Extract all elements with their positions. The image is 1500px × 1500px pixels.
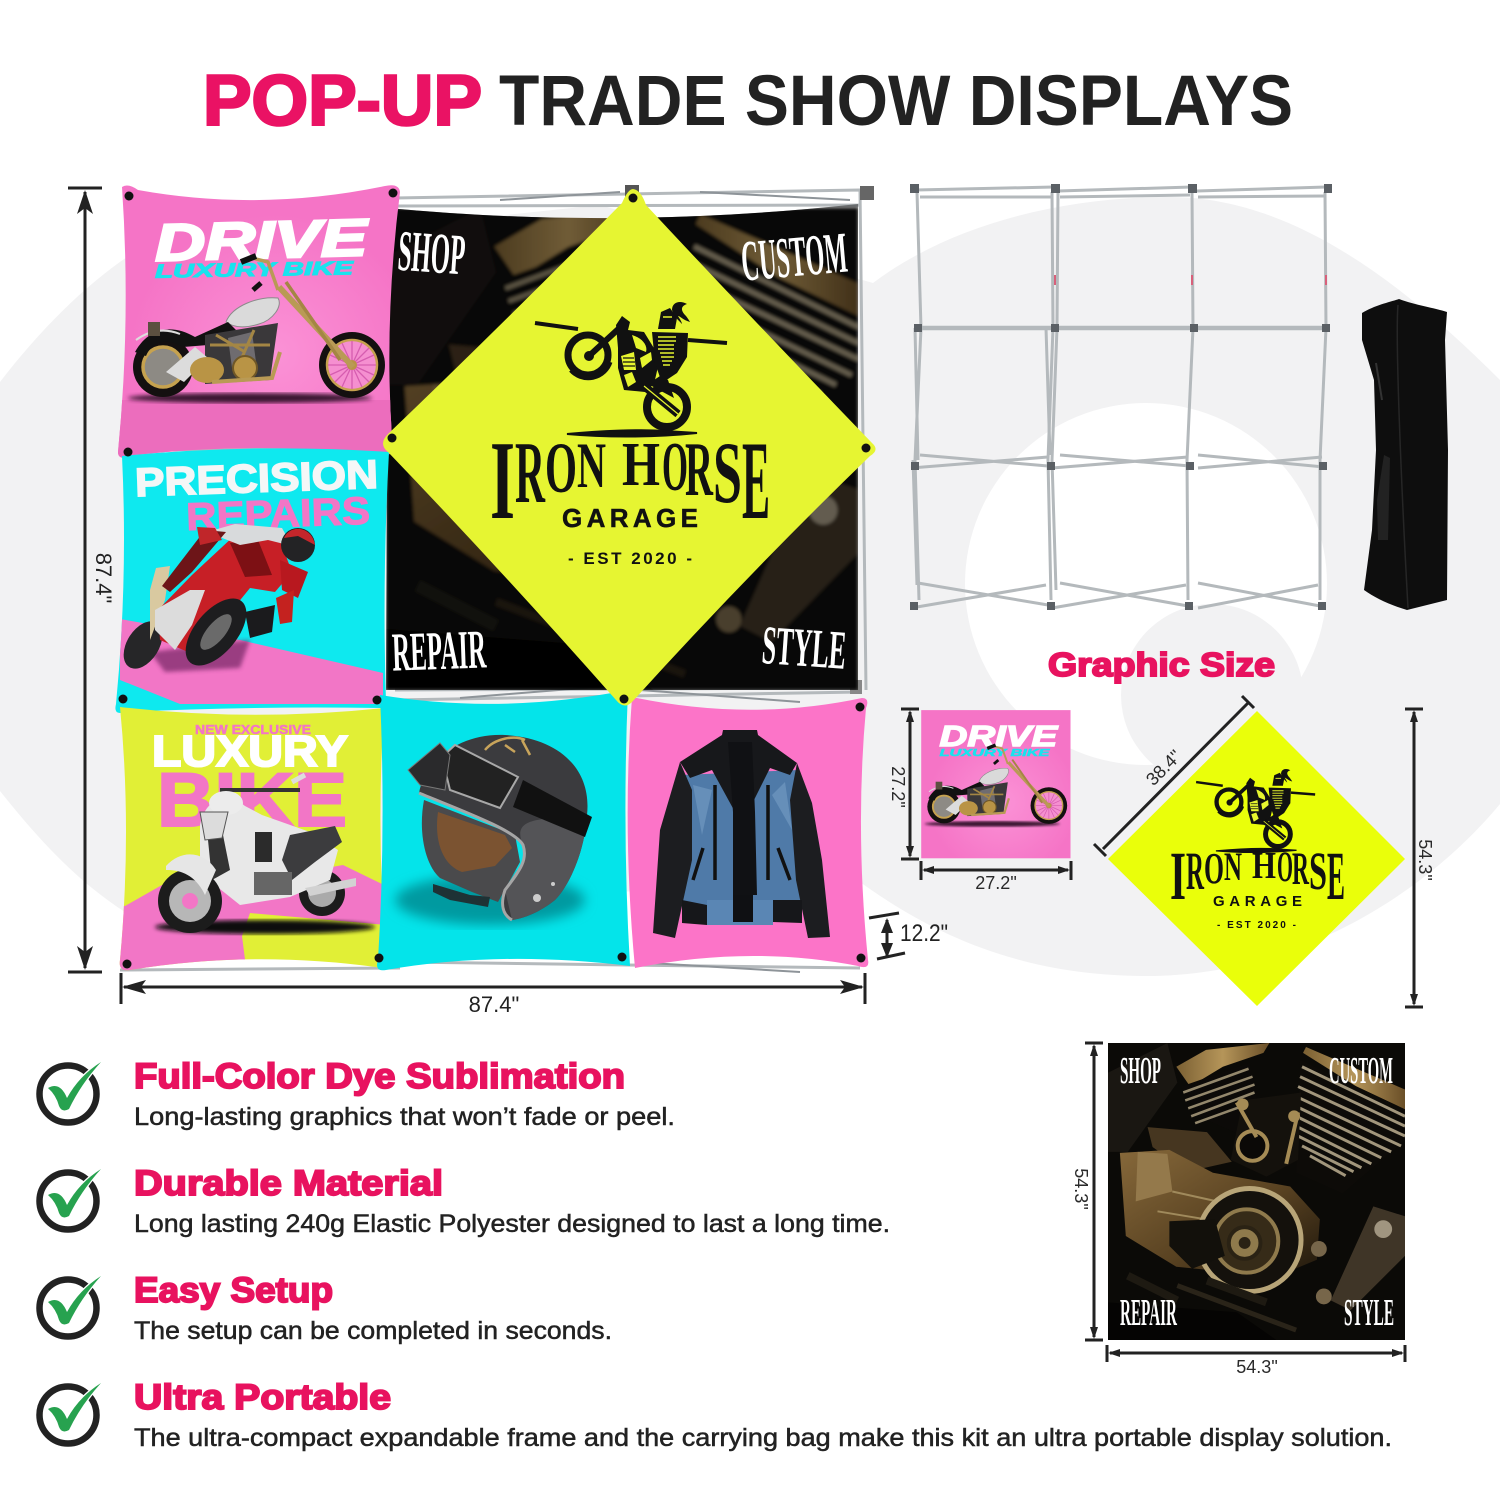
feature: dye sublimation: Long-lasting graphics that won’t fade or peel. [134,1103,675,1131]
panel: precision repairs: PRECISION [134,453,379,505]
text: established: - EST 2020 - [568,549,692,568]
panel: iron horse diamond [383,189,876,706]
panel: engine backdrop [386,200,861,692]
small graphic: iron horse diamond: - EST 2020 - [1217,920,1296,931]
icon: check mark [40,1169,101,1230]
dimension: backdrop width [1107,1345,1405,1377]
text: iron horse: O [662,429,688,506]
dimension: backdrop height [1071,1043,1103,1340]
panel: engine backdrop: REPAIR [391,618,488,683]
feature: durable material [40,1164,890,1238]
dimension: display height [68,188,116,972]
small graphic: iron horse diamond: H [1252,845,1276,887]
small graphic: iron horse diamond: O [1204,844,1224,893]
dimension: depth 12.2: 12.2" [900,920,948,947]
panel: iron horse diamond: E [742,419,770,543]
panel: drive luxury bike: DRIVE [154,209,370,273]
panel: luxury bike: LUXURY [152,727,348,776]
title: POP-UP [203,62,482,141]
feature: durable material: Long lasting 240g Elastic Polyester designed to last a long time. [134,1210,890,1238]
text: CUSTOM [1329,1050,1393,1092]
carrying bag [1362,299,1448,610]
icon: knight logo [535,302,727,436]
text: iron horse: I [490,419,515,543]
text: iron horse: R [685,426,714,512]
feature: durable material: Durable Material [134,1164,443,1203]
dimension: display width: 87.4" [469,992,519,1017]
dimension: diamond height: 54.3" [1415,839,1435,881]
feature: dye sublimation [40,1057,675,1131]
panel: precision repairs [115,448,389,713]
dimension: display height: 87.4" [91,553,116,603]
panel: luxury bike [120,707,382,970]
dimension: display width [121,973,865,1017]
panel: luxury bike: BIKE [157,758,347,843]
text: STYLE [1344,1292,1394,1334]
small graphic: iron horse diamond: O [1277,844,1293,891]
backdrop graphic [1108,1043,1405,1340]
panel: precision repairs: REPAIRS [185,490,371,539]
feature: dye sublimation: Full-Color Dye Sublimation [134,1057,625,1096]
text: iron horse: O [545,428,577,508]
panel: jacket [628,698,868,968]
icon: touring motorcycle [155,775,375,934]
backdrop graphic: SHOP [1120,1050,1161,1092]
small graphic: iron horse diamond: R [1186,841,1204,901]
dimension: backdrop height: 54.3" [1071,1168,1091,1210]
text: garage: GARAGE [562,503,698,533]
icon: helmet with goggles [408,735,592,920]
small graphic: iron horse diamond: R [1292,843,1310,895]
dimension: small graphic width: 27.2" [975,873,1017,893]
icon: check mark [40,1383,101,1444]
small graphic: iron horse diamond: N [1224,844,1242,889]
panel: luxury bike: NEW EXCLUSIVE [195,723,311,737]
dimension: diamond edge [1094,696,1254,856]
feature: ultra portable: Ultra Portable [134,1378,391,1417]
feature: ultra portable: The ultra-compact expandable frame and the carrying bag make this kit an ultra portable display solution. [134,1424,1392,1452]
small graphic: drive: LUXURY BIKE [940,747,1051,759]
feature: easy setup: Easy Setup [134,1271,333,1310]
dimension: small graphic width [921,861,1071,893]
panel: helmet [370,685,635,975]
text: iron horse: N [577,430,606,502]
icon: check mark [40,1276,101,1336]
display frame behind graphics [120,185,874,972]
text: iron horse: R [515,425,546,522]
heading: graphic size: Graphic Size [1048,646,1275,683]
small graphic: iron horse diamond: E [1327,838,1345,914]
title: TRADE SHOW DISPLAYS [499,62,1293,141]
text: iron horse: S [713,425,742,522]
feature: easy setup: The setup can be completed in seconds. [134,1317,612,1345]
panel: drive luxury bike: LUXURY BIKE [155,258,355,283]
dimension: small graphic height: 27.2" [888,766,908,808]
small graphic: iron horse diamond: S [1309,841,1327,901]
panel: drive luxury bike [115,180,405,460]
background logo shape [0,197,1500,976]
small graphic: iron horse diamond: GARAGE [1213,893,1302,910]
dimension: depth 12.2 [869,913,948,959]
small graphic: iron horse diamond [1108,711,1405,1006]
small graphic: drive [921,710,1071,858]
text: CUSTOM [739,220,850,294]
dimension: diamond edge: 38.4" [1142,746,1185,789]
dimension: diamond height [1405,709,1435,1007]
grommets [118,188,870,968]
backdrop graphic: REPAIR [1120,1292,1177,1334]
feature: ultra portable [40,1378,1392,1452]
icon: check mark [40,1062,101,1122]
icon: leather jacket [653,730,830,938]
small graphic: iron horse diamond: I [1170,838,1186,914]
text: iron horse: H [622,431,660,499]
feature: easy setup [40,1271,612,1345]
icon: racing motorcycle [116,524,315,676]
panel: engine backdrop: STYLE [760,614,848,681]
small graphic: drive: DRIVE [940,721,1058,753]
panel: engine backdrop: SHOP [396,218,467,287]
dimension: backdrop width: 54.3" [1236,1357,1278,1377]
dimension: small graphic height [888,709,919,859]
collapsed frame [910,184,1332,610]
title [203,62,1293,141]
